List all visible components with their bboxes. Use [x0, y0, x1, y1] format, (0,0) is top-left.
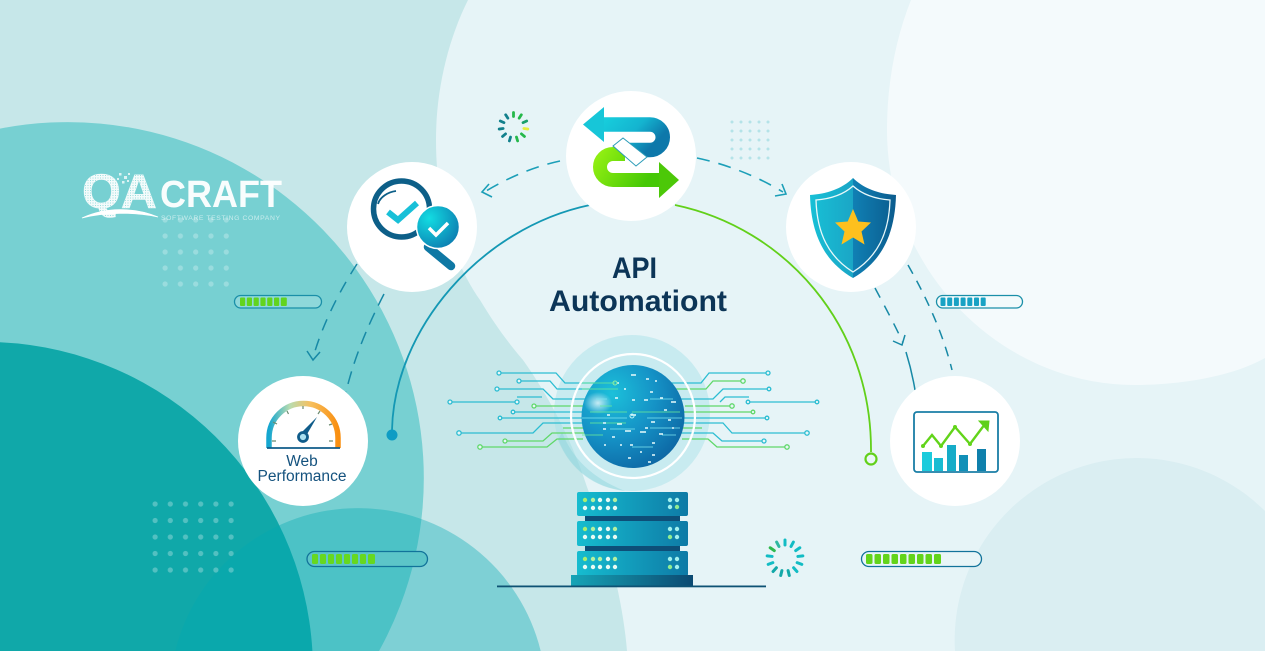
circuit lines: green	[478, 379, 789, 449]
label: Web Performance: Performance	[258, 468, 346, 485]
main arc: green	[675, 205, 876, 464]
label: Web Performance: Web	[286, 453, 318, 470]
icon: data exchange arrows	[566, 91, 696, 221]
logo: QA Craft: CRAFT	[160, 174, 282, 216]
progress bar: upper right	[936, 296, 1022, 308]
dot grid: upper left	[158, 212, 234, 292]
title: API Automationt: Automationt	[549, 285, 727, 318]
logo: QA Craft	[82, 166, 282, 222]
icon: shield with star	[786, 162, 916, 292]
title: API Automationt	[549, 252, 727, 318]
server rack	[497, 492, 766, 587]
icon: chart in window	[890, 376, 1020, 506]
globe ring	[571, 354, 695, 478]
dashed arrows: left	[307, 264, 384, 392]
progress bar: upper left	[234, 296, 322, 308]
globe	[582, 365, 684, 468]
icon: web performance gauge	[238, 376, 368, 506]
globe halo	[554, 335, 710, 491]
dot grid: lower left	[148, 496, 239, 578]
logo: QA Craft: QA	[82, 166, 157, 219]
logo: QA Craft: SOFTWARE TESTING COMPANY	[161, 215, 280, 222]
dashed arrow: top left	[482, 161, 560, 197]
loading spinner: bottom	[767, 540, 803, 575]
circuit lines: teal	[448, 371, 819, 443]
progress bar: lower right	[862, 552, 982, 566]
dashed arrows: right	[875, 265, 952, 390]
dashed arrow: top right	[697, 158, 786, 196]
progress bar: lower left	[307, 552, 428, 566]
loading spinner: top	[499, 112, 528, 141]
dot grid: top right	[728, 118, 772, 162]
title: API Automationt: API	[612, 252, 657, 285]
circuit lines and globe	[448, 335, 819, 491]
label: Web Performance	[258, 453, 346, 485]
main arc: teal	[386, 205, 590, 440]
server status lights	[583, 498, 679, 569]
icon: magnifier with check	[347, 162, 477, 292]
